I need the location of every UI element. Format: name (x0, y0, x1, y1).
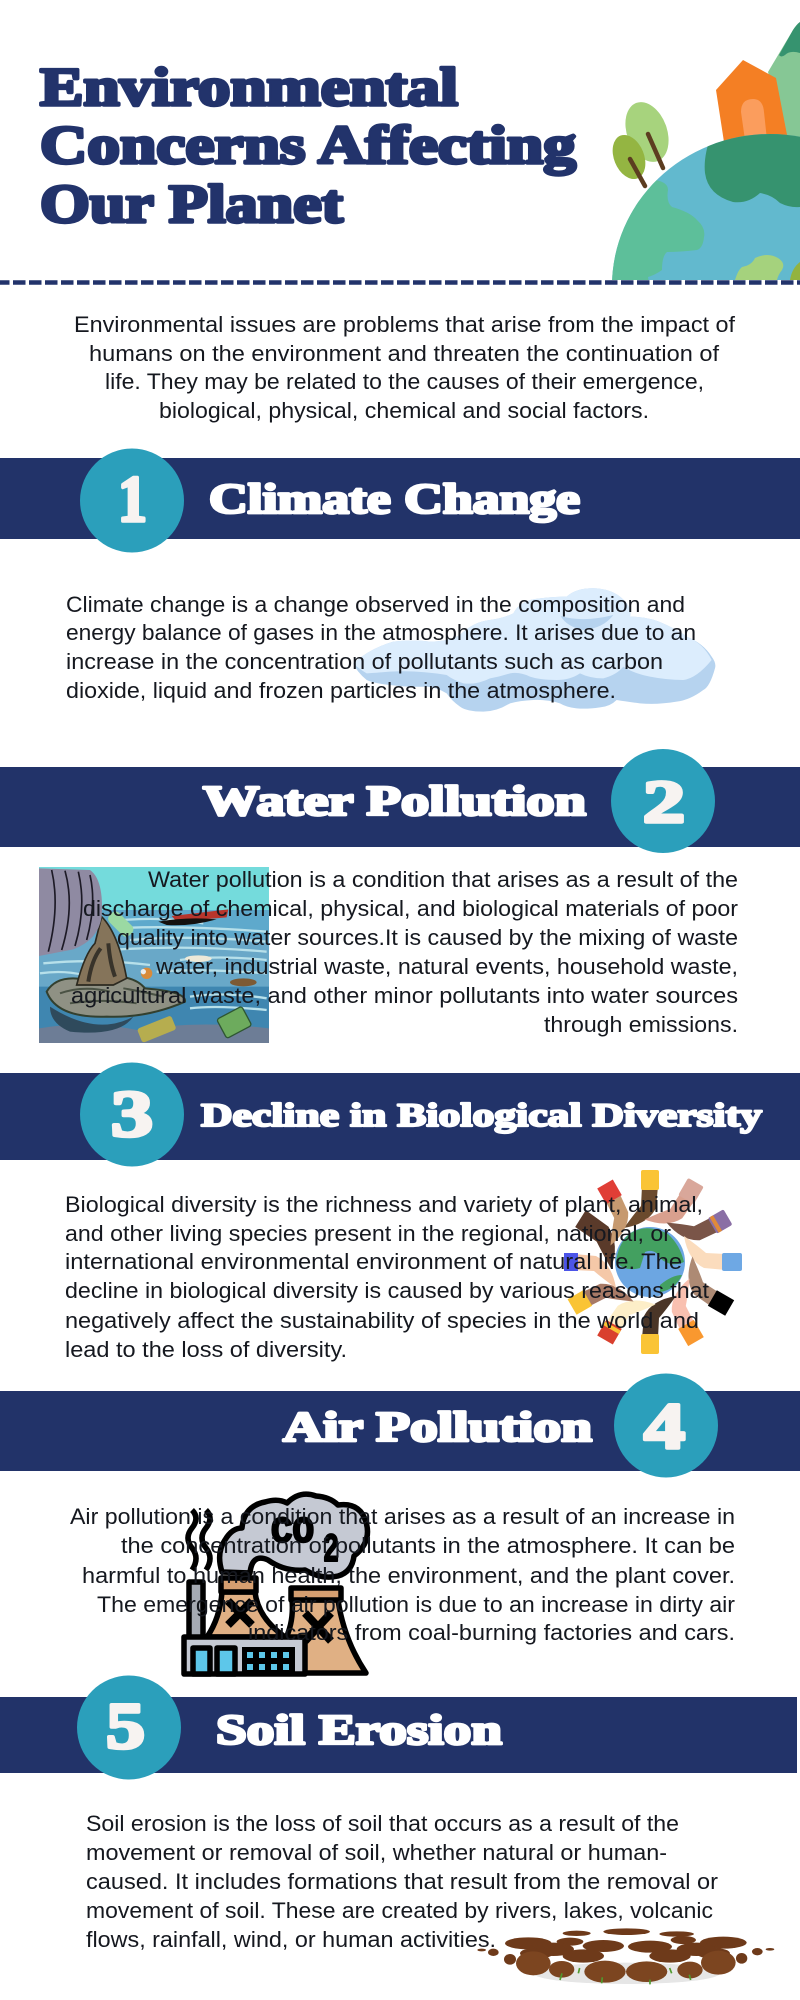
banner: air pollution heading (0, 1374, 800, 1478)
banner: biological diversity heading: Decline in Biological Diversity (201, 1098, 763, 1134)
text: air pollution: harmful to human health, the environment, and the plant cover. (82, 1563, 735, 1588)
text: water pollution: through emissions. (544, 1012, 738, 1037)
text: soil erosion: Soil erosion is the loss of soil that occurs as a result of the (86, 1811, 679, 1836)
panel: water pollution (0, 749, 800, 1043)
text: biological diversity: lead to the loss of diversity. (65, 1337, 347, 1362)
text: air pollution: the concentration of pollutants in the atmosphere. It can be (121, 1533, 735, 1558)
text: water pollution: Water pollution is a condition that arises as a result of the (148, 867, 738, 892)
banner: biological diversity heading: 3 (111, 1078, 153, 1151)
text: soil erosion: movement or removal of soil, whether natural or human- (86, 1840, 667, 1865)
title: Our Planet (40, 174, 343, 234)
text: air pollution (70, 1504, 736, 1645)
banner: water pollution heading: 2 (643, 769, 685, 835)
text: air pollution: The emergence of air pollution is due to an increase in dirty air (97, 1592, 736, 1617)
panel: air pollution (0, 1374, 800, 1674)
icon: coal factory with CO2 cloud: CO (271, 1512, 314, 1553)
intro text: life. They may be related to the causes of their emergence, (105, 369, 704, 394)
panel: climate change (0, 448, 800, 712)
text: water pollution: quality into water sources.It is caused by the mixing of waste (117, 925, 738, 950)
intro text (74, 312, 736, 423)
text: air pollution: indicators from coal-burning factories and cars. (248, 1620, 735, 1645)
text: soil erosion (86, 1811, 719, 1952)
title: Concerns Affecting (40, 115, 576, 175)
banner: soil erosion heading: 5 (106, 1690, 145, 1763)
banner: air pollution heading: Air Pollution (283, 1405, 592, 1451)
banner: soil erosion heading: Soil Erosion (216, 1708, 502, 1754)
dashed divider (0, 280, 800, 285)
text: biological diversity: and other living species present in the regional, national, or (65, 1221, 672, 1246)
text: biological diversity: decline in biological diversity is caused by various reasons that (65, 1278, 710, 1303)
text: biological diversity: international environmental environment of natural life. The (65, 1249, 682, 1274)
icon: earth with house, mountain and trees (612, 22, 800, 280)
text: water pollution: water, industrial waste, natural events, household waste, (155, 954, 738, 979)
banner: climate change heading: 1 (118, 463, 147, 536)
intro text: humans on the environment and threaten the continuation of (89, 341, 720, 366)
intro text: Environmental issues are problems that arise from the impact of (74, 312, 736, 337)
text: air pollution: Air pollution is a condition that arises as a result of an increase in (70, 1504, 735, 1529)
text: soil erosion: movement of soil. These are created by rivers, lakes, volcanic (86, 1898, 713, 1923)
text: soil erosion: caused. It includes formations that result from the removal or (86, 1869, 719, 1894)
icon: eroded soil mounds (477, 1928, 774, 1984)
title (40, 57, 576, 234)
panel: decline in biological diversity (0, 1062, 800, 1362)
banner: air pollution heading: 4 (644, 1390, 685, 1463)
text: climate change (66, 592, 696, 703)
icon: hands around globe (564, 1169, 743, 1354)
icon: coal factory with CO2 cloud: 2 (323, 1529, 339, 1574)
banner: soil erosion heading (0, 1676, 797, 1780)
banner: climate change heading: Climate Change (209, 477, 580, 523)
text: water pollution: discharge of chemical, physical, and biological materials of poor (83, 896, 739, 921)
text: biological diversity (65, 1192, 710, 1362)
banner: water pollution heading: Water Pollution (203, 779, 586, 825)
text: water pollution: agricultural waste, and other minor pollutants into water sources (71, 983, 738, 1008)
text: climate change: increase in the concentration of pollutants such as carbon (66, 649, 663, 674)
text: climate change: energy balance of gases in the atmosphere. It arises due to an (66, 620, 696, 645)
banner: water pollution heading (0, 749, 800, 853)
text: biological diversity: Biological diversity is the richness and variety of plant, animal, (65, 1192, 703, 1217)
text: climate change: Climate change is a change observed in the composition and (66, 592, 685, 617)
text: soil erosion: flows, rainfall, wind, or human activities. (86, 1927, 496, 1952)
text: water pollution (71, 867, 739, 1037)
illustration: polluted water with discharge pipe (39, 867, 269, 1043)
banner: biological diversity heading (0, 1062, 800, 1166)
icon: coal factory with CO2 cloud (184, 1494, 368, 1674)
text: climate change: dioxide, liquid and frozen particles in the atmosphere. (66, 678, 616, 703)
title: Environmental (40, 57, 458, 117)
intro text: biological, physical, chemical and social factors. (159, 398, 649, 423)
icon: cloud (353, 588, 715, 712)
panel: soil erosion (0, 1676, 797, 1984)
banner: climate change heading (0, 448, 800, 552)
text: biological diversity: negatively affect the sustainability of species in the world and (65, 1308, 699, 1333)
